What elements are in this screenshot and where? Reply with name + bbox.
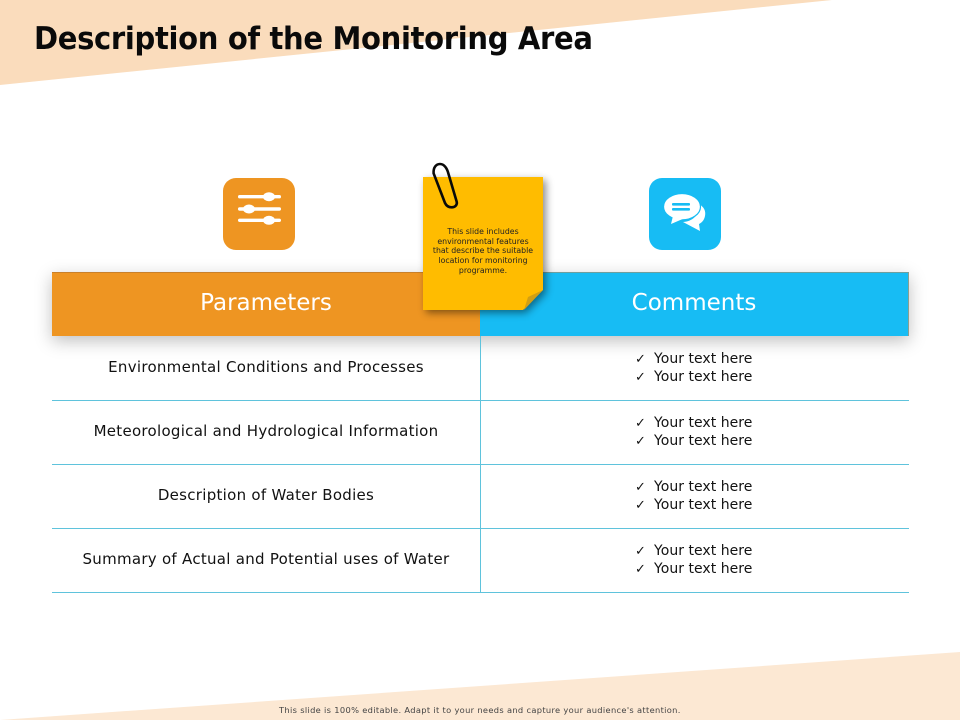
footer note: This slide is 100% editable. Adapt it to your needs and capture your audience's attention. xyxy=(279,705,681,715)
row 1 comments xyxy=(635,351,752,385)
header: Parameters: Parameters xyxy=(200,290,332,316)
icon: sliders xyxy=(223,178,295,250)
row 4 comments: ✓ xyxy=(635,562,646,577)
header: Parameters xyxy=(52,272,480,336)
top decorative banner xyxy=(0,0,832,85)
row 2 comments: ✓ xyxy=(635,416,646,431)
icon: chat bubbles xyxy=(649,178,721,250)
row 2 comments: ✓ xyxy=(635,434,646,449)
title: Description of the Monitoring Area xyxy=(34,21,593,57)
row 1 comments: Your text here xyxy=(654,351,752,367)
row 4 parameter: Summary of Actual and Potential uses of Water xyxy=(82,550,450,568)
row 1 parameter: Environmental Conditions and Processes xyxy=(108,358,424,376)
bottom decorative banner xyxy=(2,652,960,720)
row 3 comments: Your text here xyxy=(654,497,752,513)
sticky note xyxy=(420,162,552,318)
row 3 comments: ✓ xyxy=(635,480,646,495)
row 2 comments: Your text here xyxy=(654,433,752,449)
row 3 comments: Your text here xyxy=(654,479,752,495)
header: Comments xyxy=(480,272,909,336)
row 4 comments: Your text here xyxy=(654,561,752,577)
row 1 comments: ✓ xyxy=(635,370,646,385)
note text: This slide includes environmental features that describe the suitable location for monitoring programme. xyxy=(433,227,533,275)
row 3 parameter: Description of Water Bodies xyxy=(158,486,374,504)
row 1 comments: ✓ xyxy=(635,352,646,367)
header: Comments: Comments xyxy=(632,290,756,316)
row 2 parameter: Meteorological and Hydrological Information xyxy=(94,422,438,440)
row 1 comments: Your text here xyxy=(654,369,752,385)
row 2 comments xyxy=(635,415,752,449)
row 4 comments: Your text here xyxy=(654,543,752,559)
row 3 comments: ✓ xyxy=(635,498,646,513)
row 3 comments xyxy=(635,479,752,513)
row 2 comments: Your text here xyxy=(654,415,752,431)
icon: paperclip xyxy=(432,162,458,209)
table header shadow xyxy=(52,272,909,336)
row 4 comments: ✓ xyxy=(635,544,646,559)
row 4 comments xyxy=(635,543,752,577)
